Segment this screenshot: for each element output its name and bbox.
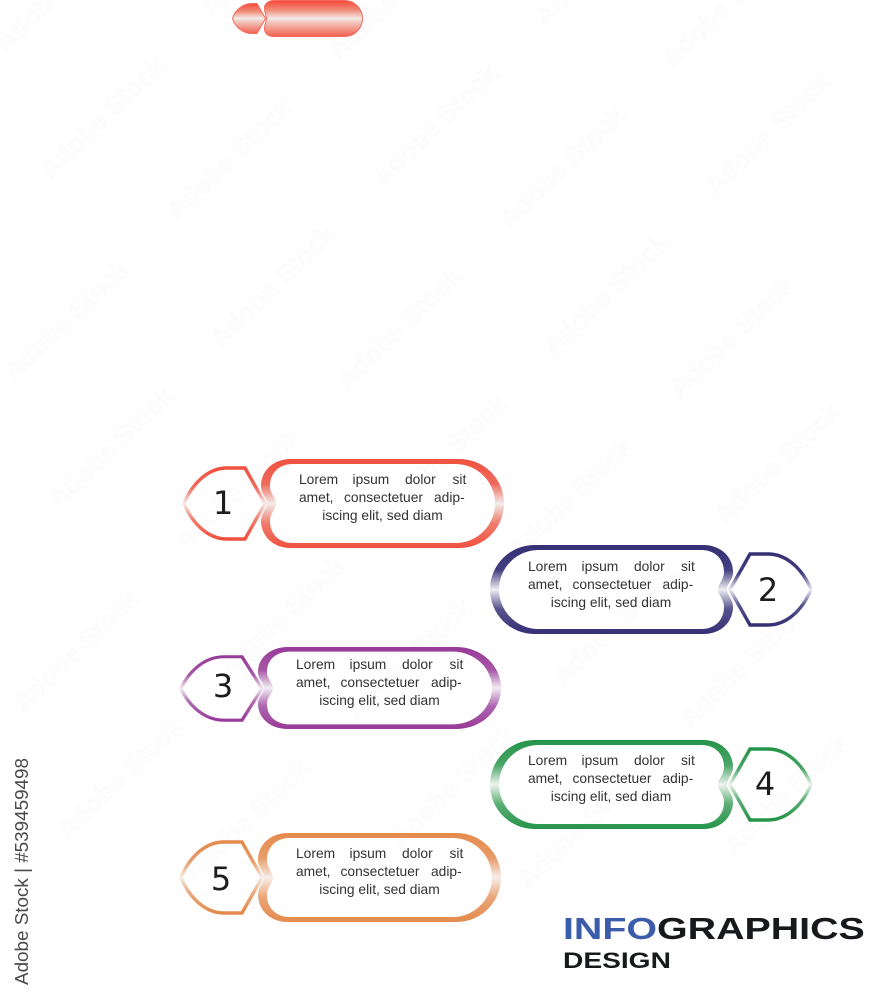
text block 4: amet, <box>528 771 563 786</box>
text block 2: adip- <box>662 577 693 592</box>
watermark pattern: Adobe Stock <box>330 261 468 395</box>
text block 2: dolor <box>634 559 665 574</box>
watermark pattern: Adobe Stock <box>717 726 855 860</box>
watermark pattern: Adobe Stock <box>708 396 846 530</box>
badge 4 outline <box>730 749 811 820</box>
text block 1: sit <box>452 472 466 487</box>
text block 3: consectetuer <box>340 675 420 690</box>
text block 2: consectetuer <box>572 577 652 592</box>
text block 2: ipsum <box>582 559 618 574</box>
text block 1: ipsum <box>352 472 389 487</box>
number 2: 2 <box>758 571 778 609</box>
text block 3: sit <box>450 657 463 672</box>
watermark pattern: Adobe Stock <box>375 388 513 522</box>
number 4: 4 <box>755 765 775 803</box>
text block 4: dolor <box>634 753 665 768</box>
watermark pattern: Adobe Stock <box>7 583 145 717</box>
text block 5: consectetuer <box>340 864 420 879</box>
capsule 2 frame <box>490 545 733 634</box>
capsule 1 frame <box>261 459 504 548</box>
text block 5: iscing elit, sed diam <box>319 882 440 897</box>
text block 1: Lorem <box>299 472 338 487</box>
text block 1: adip- <box>434 490 465 505</box>
watermark pattern: Adobe Stock <box>366 58 504 192</box>
text block 2: sit <box>681 559 695 574</box>
number 1: 1 <box>213 484 233 522</box>
watermark pattern: Adobe Stock <box>160 92 298 226</box>
badge 3 outline <box>181 657 262 720</box>
subtitle: DESIGN: DESIGN <box>563 949 671 973</box>
text block 1: amet, <box>299 490 334 505</box>
text block 4: sit <box>681 753 695 768</box>
watermark pattern: Adobe Stock <box>169 422 307 556</box>
text block 5: adip- <box>431 864 462 879</box>
text block 3: Lorem <box>296 657 335 672</box>
text block 4: Lorem <box>528 753 567 768</box>
item 4: green step <box>490 740 811 829</box>
watermark pattern: Adobe Stock <box>340 591 478 725</box>
vertical stock credit: Adobe Stock | #539459498 <box>12 758 32 985</box>
text block 5: Lorem <box>296 846 335 861</box>
item 5: orange step <box>181 833 501 922</box>
watermark pattern: Adobe Stock <box>51 710 189 844</box>
item 1: red step <box>184 459 504 548</box>
capsule 3 frame <box>258 647 501 729</box>
watermark pattern: Adobe Stock <box>213 549 351 683</box>
watermark pattern: Adobe Stock <box>546 557 684 691</box>
badge 1 outline <box>184 468 265 539</box>
text block 1: dolor <box>405 472 436 487</box>
watermark pattern: Adobe Stock <box>33 50 171 184</box>
text block 2: Lorem <box>528 559 567 574</box>
text block 1: iscing elit, sed diam <box>322 508 443 523</box>
number 5: 5 <box>211 860 231 898</box>
text block 4: adip- <box>662 771 693 786</box>
text block 5: sit <box>450 846 463 861</box>
text block 3: dolor <box>402 657 433 672</box>
text block 3: ipsum <box>350 657 386 672</box>
item 3: purple step <box>181 647 501 729</box>
watermark pattern: Adobe Stock <box>204 219 342 353</box>
text block 5: ipsum <box>350 846 386 861</box>
text block 1: consectetuer <box>344 490 423 505</box>
watermark pattern: Adobe Stock <box>493 100 631 234</box>
text block 2: amet, <box>528 577 563 592</box>
badge 2 outline <box>730 554 811 625</box>
text block 3: iscing elit, sed diam <box>319 693 440 708</box>
text block 2: iscing elit, sed diam <box>551 595 671 610</box>
text block 5: dolor <box>402 846 433 861</box>
watermark pattern: Adobe Stock <box>663 269 801 403</box>
text block 3: amet, <box>296 675 331 690</box>
text block 4: iscing elit, sed diam <box>551 789 671 804</box>
title: INFOGRAPHICS: INFOGRAPHICS <box>563 911 865 946</box>
watermark pattern: Adobe Stock <box>384 718 522 852</box>
item 2: navy step <box>490 545 811 634</box>
watermark pattern: Adobe Stock <box>178 752 316 886</box>
filled red capsule fragment at top <box>232 0 362 36</box>
capsule 5 frame <box>258 833 501 922</box>
text block 4: consectetuer <box>572 771 652 786</box>
watermark pattern: Adobe Stock <box>511 760 649 894</box>
watermark pattern: Adobe Stock <box>537 227 675 361</box>
watermark pattern: Adobe Stock <box>673 599 811 733</box>
text block 3: adip- <box>431 675 462 690</box>
badge 5 outline <box>181 842 262 913</box>
watermark pattern: Adobe Stock <box>0 253 135 387</box>
watermark pattern: Adobe Stock <box>501 430 639 564</box>
text block 5: amet, <box>296 864 331 879</box>
number 3: 3 <box>213 667 233 705</box>
watermark pattern: Adobe Stock <box>699 66 837 200</box>
capsule 4 frame <box>490 740 733 829</box>
watermark pattern: Adobe Stock <box>42 380 180 514</box>
text block 4: ipsum <box>582 753 618 768</box>
